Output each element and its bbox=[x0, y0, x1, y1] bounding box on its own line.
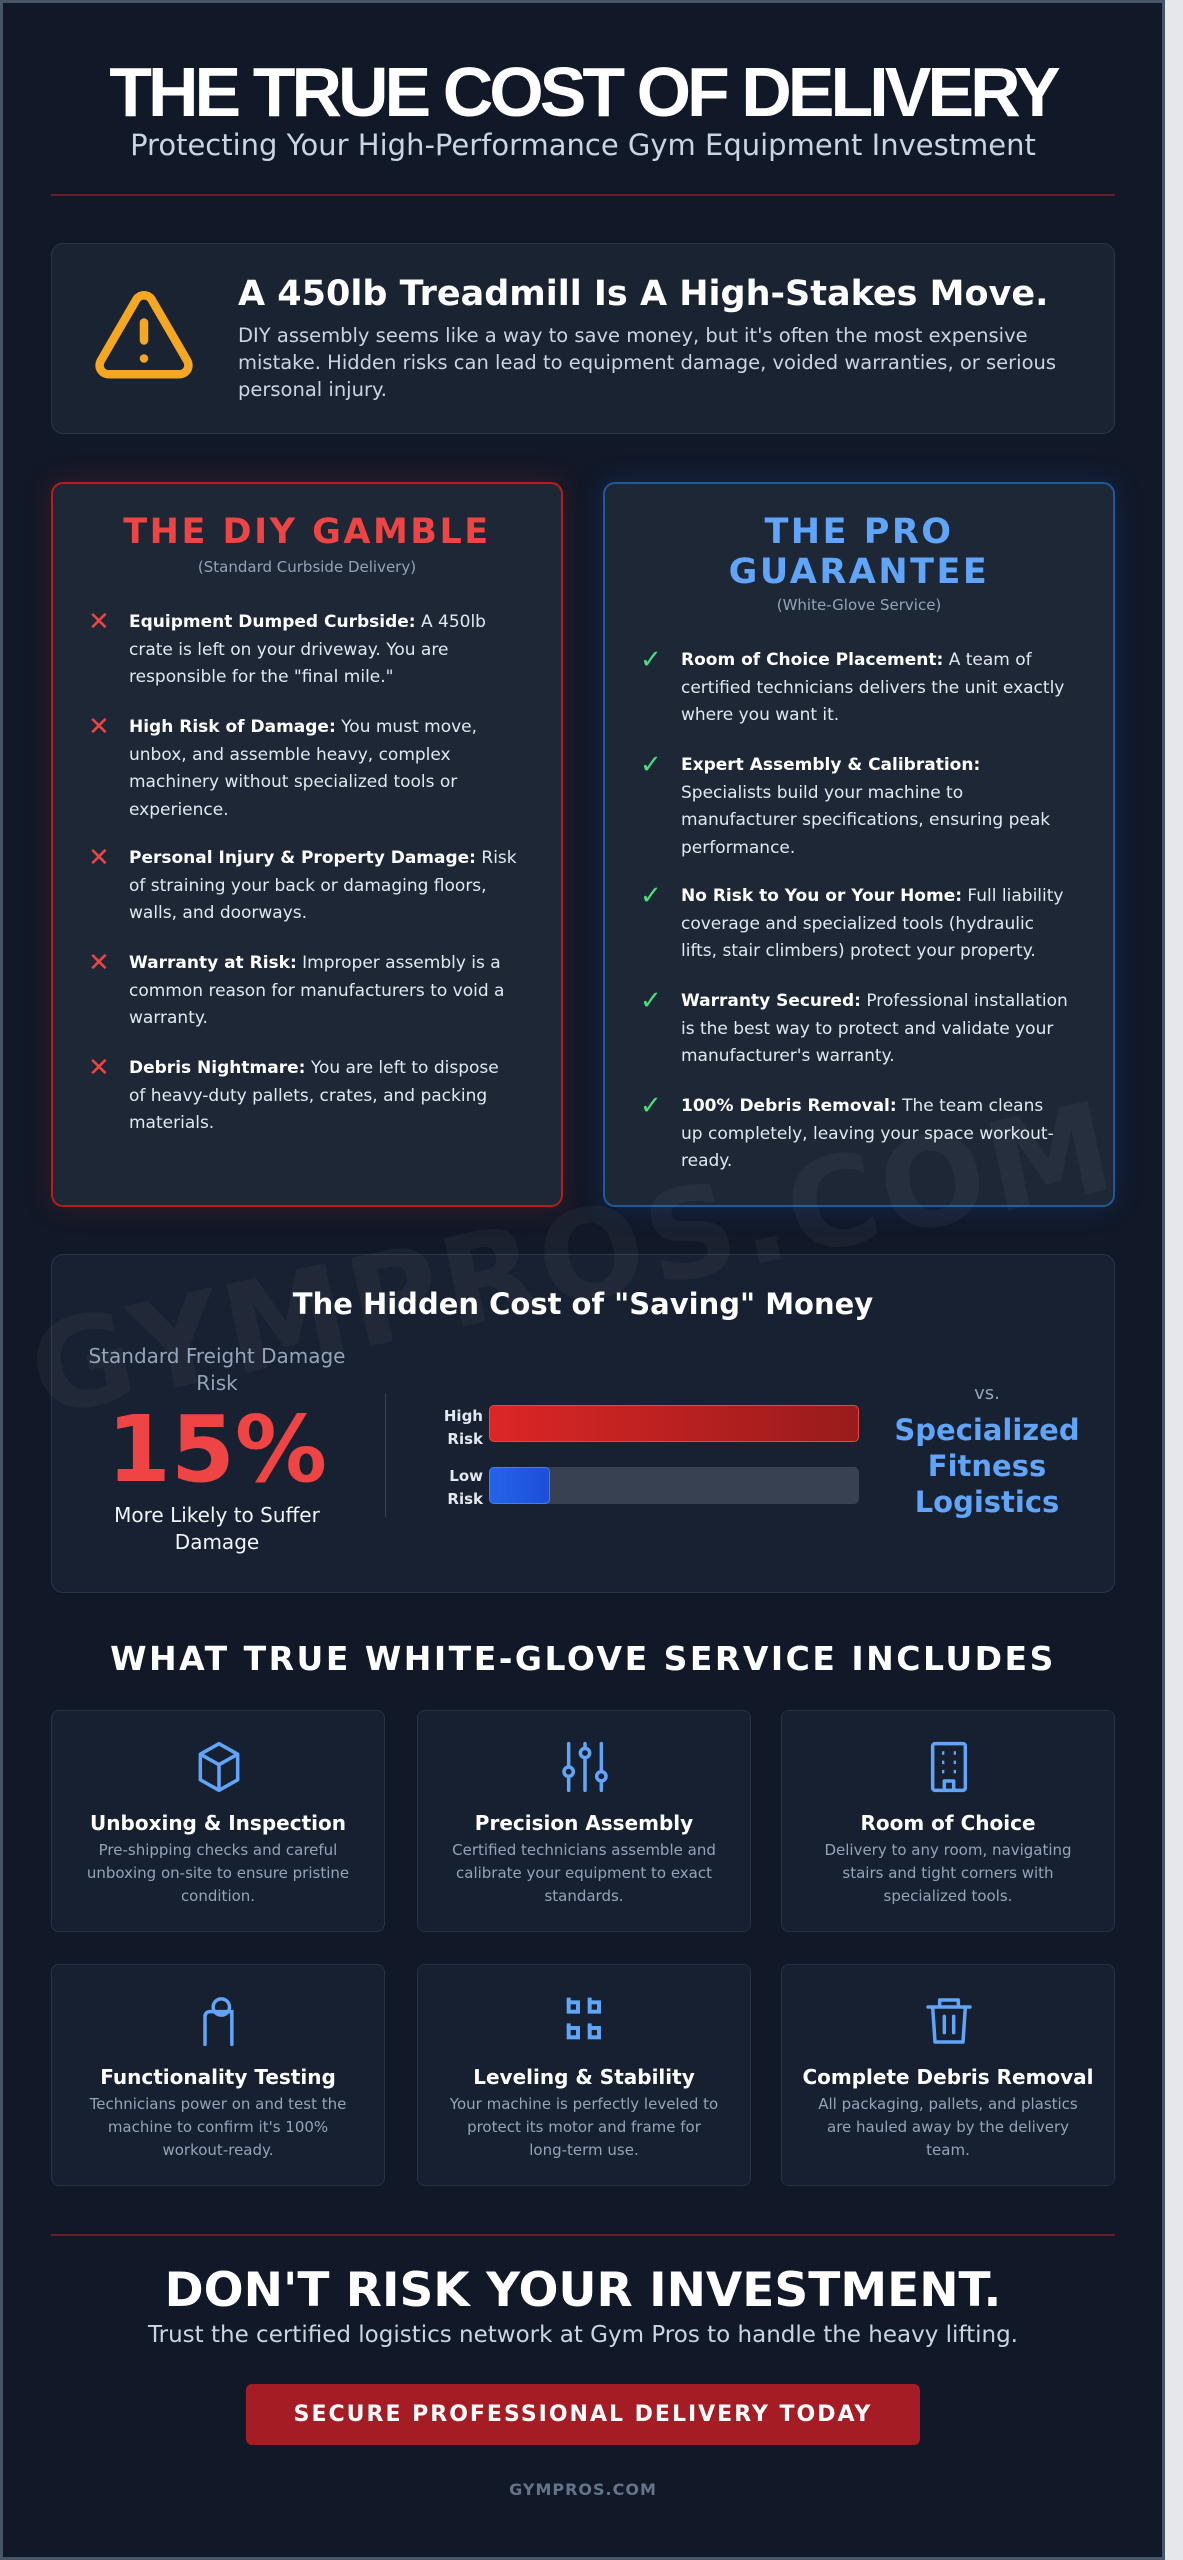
item: 100% Debris Removal: The team cleans up completely, leaving your space workout-ready. bbox=[681, 1096, 1054, 1171]
card: leveling bbox=[417, 1964, 751, 2186]
stat: 15%: More Likely to Suffer Damage bbox=[114, 1503, 320, 1554]
hidden cost heading: The Hidden Cost of "Saving" Money bbox=[293, 1287, 873, 1321]
card: leveling: Your machine is perfectly leveled to protect its motor and frame for long-term use. bbox=[450, 2095, 718, 2159]
icon: warning triangle bbox=[95, 291, 193, 378]
item: of heavy-duty pallets, crates, and packing materials. bbox=[129, 1086, 487, 1133]
card: functionality testing bbox=[51, 1964, 385, 2186]
footer: GYMPROS.COM bbox=[509, 2480, 657, 2499]
comparison: specialized logistics: vs. bbox=[974, 1383, 1000, 1404]
panel: DIY gamble bbox=[51, 482, 563, 1207]
item: Debris Nightmare: You are left to dispose bbox=[129, 1058, 499, 1078]
panel: pro guarantee: ✓ bbox=[640, 881, 662, 911]
stat: 15% bbox=[88, 1344, 346, 1554]
bar chart: Risk bbox=[447, 1490, 483, 1508]
card: unboxing: Pre-shipping checks and careful unboxing on-site to ensure pristine condition. bbox=[87, 1841, 349, 1905]
title: THE TRUE COST OF DELIVERY bbox=[109, 53, 1057, 131]
closing heading: DON'T RISK YOUR INVESTMENT. bbox=[165, 2263, 1001, 2318]
closing text: Trust the certified logistics network at Gym Pros to handle the heavy lifting. bbox=[148, 2322, 1018, 2348]
item: Equipment Dumped Curbside: A 450lb crate is left on your driveway. You are responsible for the "final mile." bbox=[129, 612, 486, 687]
panel: pro guarantee: ✓ bbox=[640, 1091, 662, 1121]
item bbox=[88, 1053, 499, 1133]
bar chart bbox=[444, 1405, 859, 1508]
item: No Risk to You or Your Home: Full liability coverage and specialized tools (hydraulic lifts, stair climbers) protect your property. bbox=[681, 886, 1063, 961]
card: debris removal: All packaging, pallets, and plastics are hauled away by the delivery team. bbox=[818, 2095, 1078, 2159]
alert heading: A 450lb Treadmill Is A High-Stakes Move. bbox=[238, 274, 1048, 314]
card: unboxing bbox=[51, 1710, 385, 1932]
alert text: DIY assembly seems like a way to save money, but it's often the most expensive mistake. Hidden risks can lead to equipment damage, voided warranties, or serious personal injury. bbox=[238, 324, 1056, 401]
panel: pro guarantee: ✓ bbox=[640, 645, 662, 675]
panel: alert bbox=[51, 243, 1115, 434]
panel: DIY gamble: ✕ bbox=[88, 948, 110, 978]
watermark: GYMPROS.COM bbox=[18, 1075, 1128, 1445]
stat: 15%: Standard Freight Damage Risk bbox=[88, 1344, 346, 1395]
card: functionality testing: Technicians power on and test the machine to confirm it's 100% workout-ready. bbox=[90, 2095, 346, 2159]
panel: DIY gamble: ✕ bbox=[88, 843, 110, 873]
panel: DIY gamble: ✕ bbox=[88, 1053, 110, 1083]
card: precision assembly: Certified technicians assemble and calibrate your equipment to exact standards. bbox=[452, 1841, 716, 1905]
bar chart: Low bbox=[449, 1467, 483, 1485]
card: functionality testing: Functionality Testing bbox=[100, 2065, 336, 2089]
card: leveling: Leveling & Stability bbox=[473, 2065, 695, 2089]
pro heading bbox=[729, 512, 989, 592]
panel: pro guarantee: (White-Glove Service) bbox=[777, 596, 941, 614]
card: unboxing: Unboxing & Inspection bbox=[90, 1811, 346, 1835]
subtitle: Protecting Your High-Performance Gym Equipment Investment bbox=[130, 128, 1036, 162]
panel: pro guarantee bbox=[603, 482, 1115, 1207]
item: Warranty Secured: Professional installation is the best way to protect and validate your manufacturer's warranty. bbox=[681, 991, 1068, 1066]
pro heading: GUARANTEE bbox=[729, 552, 989, 592]
button bbox=[246, 2384, 920, 2445]
panel: pro guarantee: ✓ bbox=[640, 986, 662, 1016]
card: precision assembly bbox=[417, 1710, 751, 1932]
stat: 15%: 15% bbox=[107, 1396, 327, 1503]
panel: pro guarantee: ✓ bbox=[640, 750, 662, 780]
card: room of choice: Room of Choice bbox=[860, 1811, 1036, 1835]
card: debris removal: Complete Debris Removal bbox=[802, 2065, 1094, 2089]
card: precision assembly: Precision Assembly bbox=[475, 1811, 693, 1835]
panel: DIY gamble: ✕ bbox=[88, 607, 110, 637]
card: room of choice bbox=[781, 1710, 1115, 1932]
item: Room of Choice Placement: A team of certified technicians delivers the unit exactly where you want it. bbox=[681, 650, 1064, 725]
button: SECURE PROFESSIONAL DELIVERY TODAY bbox=[294, 2402, 872, 2427]
panel: DIY gamble: (Standard Curbside Delivery) bbox=[198, 558, 416, 576]
DIY heading: THE DIY GAMBLE bbox=[123, 512, 491, 552]
pro heading: THE PRO bbox=[764, 512, 954, 552]
item bbox=[640, 750, 1050, 858]
services heading: WHAT TRUE WHITE-GLOVE SERVICE INCLUDES bbox=[110, 1639, 1056, 1678]
card: debris removal bbox=[781, 1964, 1115, 2186]
bar chart: Risk bbox=[447, 1430, 483, 1448]
card: room of choice: Delivery to any room, navigating stairs and tight corners with specialized tools. bbox=[824, 1841, 1072, 1905]
item: Expert Assembly & Calibration: bbox=[681, 755, 980, 775]
bar chart: High bbox=[444, 1407, 483, 1425]
panel: DIY gamble: ✕ bbox=[88, 712, 110, 742]
comparison: specialized logistics: Specialized Fitness Logistics bbox=[894, 1413, 1080, 1519]
item: Warranty at Risk: Improper assembly is a common reason for manufacturers to void a warranty. bbox=[129, 953, 504, 1028]
panel: hidden cost bbox=[51, 1254, 1115, 1593]
item: High Risk of Damage: You must move, unbox, and assemble heavy, complex machinery without specialized tools or experience. bbox=[129, 717, 477, 820]
item: Personal Injury & Property Damage: Risk of straining your back or damaging floors, walls, and doorways. bbox=[129, 848, 517, 923]
item: Specialists build your machine to manufacturer specifications, ensuring peak performance. bbox=[681, 782, 1050, 858]
